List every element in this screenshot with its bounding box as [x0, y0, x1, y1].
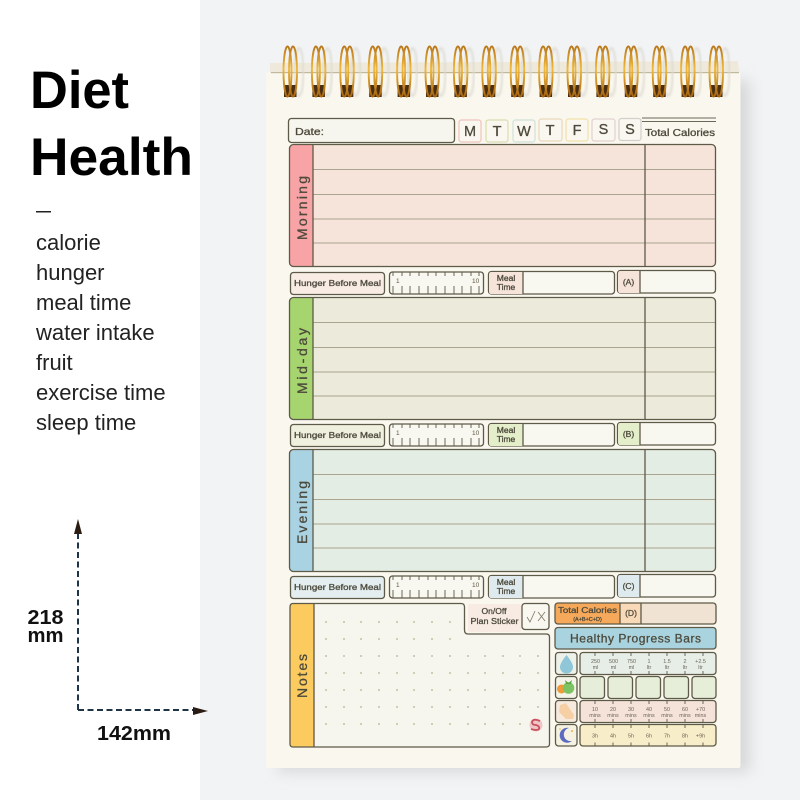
exercise row: 20	[610, 707, 616, 713]
background: white left column	[0, 0, 200, 800]
width label: 142mm	[97, 723, 171, 745]
tracker row: morning: 10	[472, 278, 480, 285]
exercise row: mins	[607, 713, 619, 719]
tracker row: mid-day: Hunger Before Meal	[294, 430, 381, 440]
exercise row: mins	[589, 713, 601, 719]
water row: ml	[629, 665, 634, 671]
tracker row: mid-day: 1	[396, 430, 400, 437]
tracker row: evening: Time	[497, 586, 516, 596]
weekday boxes	[459, 118, 641, 142]
weekday boxes: S	[599, 122, 608, 138]
panel: morning: Morning	[294, 176, 310, 240]
sleep row: 3h	[592, 734, 598, 740]
notebook paper shadow	[278, 80, 750, 772]
tracker row: morning	[290, 270, 716, 294]
background: grey photo area	[200, 0, 800, 800]
tracker row: evening: 10	[472, 582, 480, 589]
dimension arrows	[74, 519, 208, 715]
water row: +2.5	[695, 659, 706, 665]
tracker row: evening: Hunger Before Meal	[294, 582, 381, 592]
exercise row: mins	[643, 713, 655, 719]
exercise row	[556, 700, 716, 722]
on/off plan sticker: On/Off	[482, 606, 507, 616]
title	[30, 61, 193, 187]
feature list: exercise time	[36, 380, 166, 405]
tracker row: evening: Meal	[497, 577, 515, 587]
sleep row: 8h	[682, 734, 688, 740]
feature list: calorie	[36, 230, 101, 255]
weekday boxes: W	[517, 124, 531, 140]
weekday boxes: T	[493, 124, 502, 140]
height label: mm	[28, 625, 64, 647]
water row: ml	[593, 665, 598, 671]
panel: mid-day	[290, 298, 716, 420]
total calories summary	[555, 603, 716, 624]
feature list	[35, 211, 166, 435]
sleep row	[556, 724, 716, 746]
tracker row: morning: (A)	[623, 277, 634, 287]
total calories summary: Total Calories	[558, 605, 617, 615]
total calories summary: (D)	[625, 608, 637, 618]
sleep row: 6h	[646, 734, 652, 740]
feature list: sleep time	[36, 410, 136, 435]
water row: ltr	[683, 665, 687, 671]
weekday boxes: S	[625, 122, 635, 138]
water row: 2	[684, 659, 686, 665]
sleep row: +9h	[696, 734, 705, 740]
panel: evening	[290, 450, 716, 572]
healthy progress bars heading	[555, 628, 716, 649]
tracker row: morning: Hunger Before Meal	[294, 278, 381, 288]
on/off plan sticker: Plan Sticker	[470, 616, 519, 626]
feature list: hunger	[36, 260, 105, 285]
notes dot grid	[325, 621, 539, 725]
panel: notes: Notes	[294, 654, 310, 698]
feature list: fruit	[36, 350, 73, 375]
icon: sticker logo	[530, 718, 542, 732]
sleep row: 5h	[628, 734, 634, 740]
total calories summary: (A+B+C+D)	[573, 617, 602, 623]
panel: mid-day: Mid-day	[294, 328, 310, 394]
water row: ml	[611, 665, 616, 671]
tracker row: morning: 1	[396, 278, 400, 285]
feature list: water intake	[35, 320, 155, 345]
total calories header: Total Calories	[645, 128, 715, 139]
water row: ltr	[647, 665, 651, 671]
exercise row: mins	[625, 713, 637, 719]
healthy progress bars heading: Healthy Progress Bars	[570, 632, 701, 646]
notebook top band	[270, 61, 739, 73]
title: Health	[30, 128, 193, 187]
weekday boxes: F	[573, 123, 582, 139]
exercise row: mins	[661, 713, 673, 719]
tracker row: mid-day: Meal	[497, 425, 515, 435]
sleep row: 4h	[610, 734, 616, 740]
height label	[28, 607, 64, 647]
panel: morning	[290, 144, 716, 266]
water row: 250	[591, 659, 600, 665]
tracker row: mid-day: 10	[472, 430, 480, 437]
height label: 218	[28, 607, 64, 629]
weekday boxes: M	[464, 124, 476, 140]
exercise row: mins	[695, 713, 706, 719]
total calories header	[642, 118, 716, 139]
tracker row: mid-day: (B)	[623, 429, 634, 439]
tracker row: mid-day	[290, 422, 716, 446]
water row: ltr	[698, 665, 703, 671]
exercise row: +70	[696, 707, 705, 713]
exercise row: mins	[679, 713, 691, 719]
exercise row: 60	[682, 707, 688, 713]
tracker row: morning: Time	[497, 282, 516, 292]
notebook paper	[266, 72, 740, 768]
panel: evening: Evening	[294, 481, 310, 544]
tracker row: evening: (C)	[623, 581, 635, 591]
tracker row: morning: Meal	[497, 273, 515, 283]
exercise row: 10	[592, 707, 598, 713]
fruit row	[556, 676, 716, 698]
panel: notes	[290, 604, 550, 747]
spiral binding	[284, 46, 730, 97]
date field	[288, 118, 454, 142]
water row	[556, 652, 716, 674]
water row: 750	[627, 659, 636, 665]
exercise row: 40	[646, 707, 652, 713]
on/off plan sticker	[468, 604, 549, 632]
water row: ltr	[665, 665, 669, 671]
water row: 1.5	[663, 659, 671, 665]
feature list: meal time	[36, 290, 131, 315]
water row: 500	[609, 659, 618, 665]
tracker row: mid-day: Time	[497, 434, 516, 444]
date field: Date:	[295, 127, 324, 138]
water row: 1	[648, 659, 650, 665]
tracker row: evening	[290, 574, 716, 598]
title: Diet	[30, 61, 129, 120]
exercise row: 30	[628, 707, 634, 713]
exercise row: 50	[664, 707, 670, 713]
sleep row: 7h	[664, 734, 670, 740]
tracker row: evening: 1	[396, 582, 400, 589]
weekday boxes: T	[546, 123, 555, 139]
